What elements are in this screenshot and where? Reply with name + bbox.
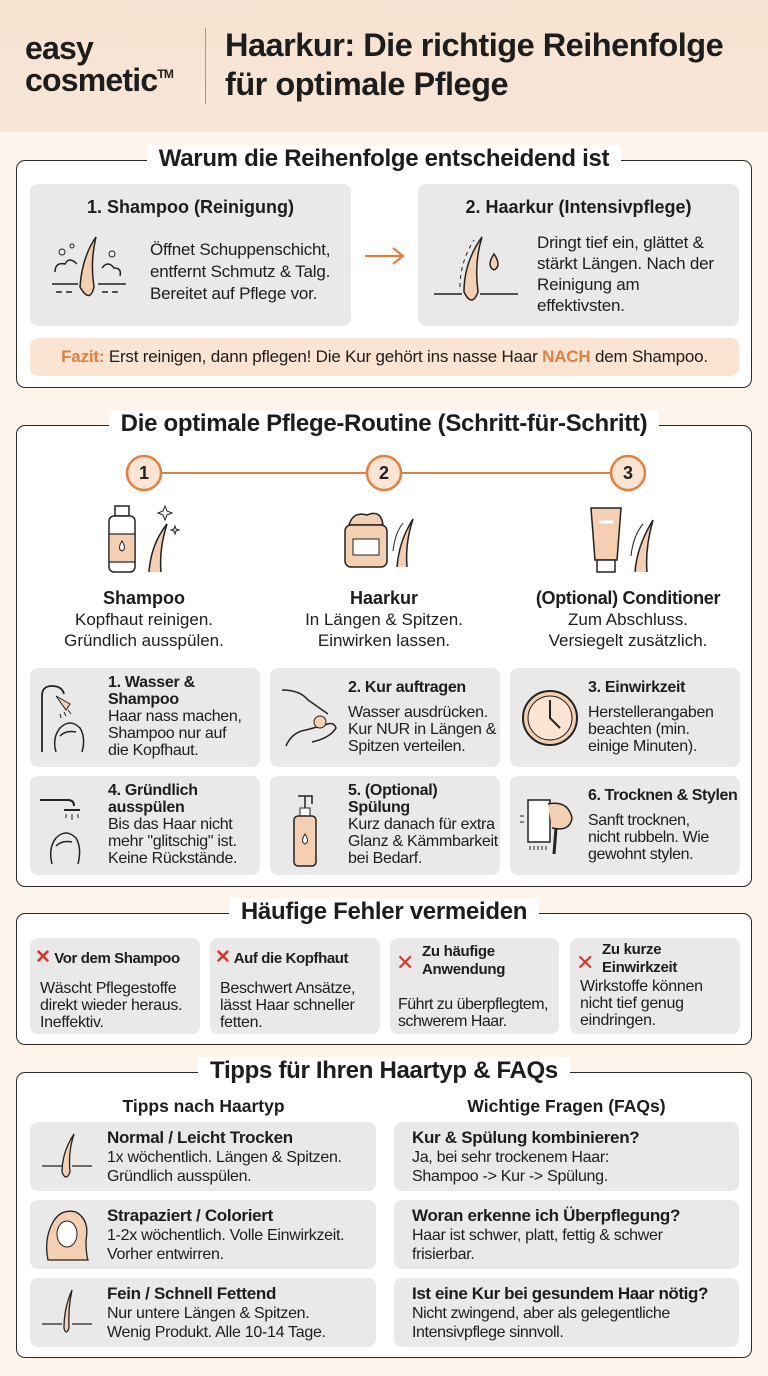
timeline: 2 — [379, 463, 389, 483]
card: kur auftragen: 2. Kur auftragen — [348, 679, 466, 696]
card: normal: 1x wöchentlich. Längen & Spitzen. — [107, 1149, 342, 1166]
panel: tipps — [16, 1072, 752, 1358]
icon: hair drop — [434, 236, 518, 301]
icon: clock — [522, 690, 578, 746]
card: zu kurz: Einwirkzeit — [602, 959, 677, 976]
fazit bar — [30, 338, 739, 376]
icon: hair — [42, 1134, 92, 1178]
step 2 text: Haarkur — [350, 588, 418, 608]
icon: hair with foam — [52, 236, 126, 296]
card: strapaziert — [30, 1200, 376, 1269]
card: zu häufig — [390, 938, 559, 1034]
logo: easy — [25, 30, 93, 66]
timeline: 1 — [139, 463, 149, 483]
panel: warum — [16, 160, 752, 388]
timeline: 3 — [623, 463, 633, 483]
card: kopfhaut: ✕ Auf die Kopfhaut — [215, 947, 348, 968]
card: zu häufig: schwerem Haar. — [398, 1013, 507, 1030]
icon: jar — [344, 512, 414, 568]
card: vor dem shampoo — [30, 938, 200, 1034]
card: ausspülen: Bis das Haar nicht — [108, 816, 232, 833]
icon: thin hair — [42, 1290, 92, 1333]
faq 1: Kur & Spülung kombinieren? — [412, 1128, 639, 1147]
faq 3: Nicht zwingend, aber als gelegentliche — [412, 1305, 670, 1322]
card: normal: Normal / Leicht Trocken — [107, 1128, 293, 1147]
faq 2: frisierbar. — [412, 1246, 474, 1263]
card: zu kurz: Wirkstoffe können — [580, 978, 703, 995]
text: haarkur: stärkt Längen. Nach der — [537, 254, 714, 273]
card: wasser — [30, 668, 260, 767]
card: einwirkzeit: einige Minuten). — [588, 738, 697, 755]
card: spülung: bei Bedarf. — [348, 850, 422, 867]
card: zu häufig: Anwendung — [422, 961, 505, 978]
subheading right: Wichtige Fragen (FAQs) — [467, 1096, 666, 1116]
card: wasser: 1. Wasser & — [108, 674, 195, 691]
card: spülung: 5. (Optional) — [348, 782, 437, 799]
subheading left: Tipps nach Haartyp — [122, 1096, 285, 1116]
card: strapaziert: Vorher entwirren. — [107, 1246, 224, 1263]
card: ausspülen: ausspülen — [108, 799, 184, 816]
card: zu kurz: ✕ — [576, 950, 594, 975]
card: kur auftragen — [270, 668, 500, 767]
text: shampoo: entfernt Schmutz & Talg. — [150, 262, 330, 281]
card: haarkur: 2. Haarkur (Intensivpflege) — [465, 197, 692, 217]
card: fein: Fein / Schnell Fettend — [107, 1284, 276, 1303]
icon: tube — [590, 507, 654, 573]
step 2 text — [305, 588, 463, 650]
card: einwirkzeit — [510, 668, 740, 767]
card: kur auftragen: Spitzen verteilen. — [348, 738, 465, 755]
card: fein: Wenig Produkt. Alle 10-14 Tage. — [107, 1324, 326, 1341]
text: shampoo: Bereitet auf Pflege vor. — [150, 284, 317, 303]
logo: cosmeticTM — [25, 62, 173, 98]
card: zu häufig: Führt zu überpflegtem, — [398, 996, 548, 1013]
card: wasser: Shampoo — [108, 691, 179, 708]
card: trocknen: Sanft trocknen, — [588, 812, 690, 829]
header band — [0, 0, 768, 132]
text: haarkur: Dringt tief ein, glättet & — [537, 233, 704, 252]
step 3 text — [536, 588, 720, 650]
card: normal: Gründlich ausspülen. — [107, 1168, 251, 1185]
card: spülung: Kurz danach für extra — [348, 816, 495, 833]
card: wasser: Haar nass machen, — [108, 708, 242, 725]
card: zu kurz: eindringen. — [580, 1012, 656, 1029]
card: haarkur — [418, 184, 739, 326]
icon: woman hair — [46, 1210, 89, 1261]
card: trocknen: gewohnt stylen. — [588, 846, 693, 863]
text: haarkur — [537, 233, 714, 315]
heading: fehler: Häufige Fehler vermeiden — [241, 898, 527, 925]
faq 2: Haar ist schwer, platt, fettig & schwer — [412, 1227, 663, 1244]
card: kur auftragen: Wasser ausdrücken. — [348, 704, 488, 721]
card: einwirkzeit: beachten (min. — [588, 721, 690, 738]
card: wasser: die Kopfhaut. — [108, 742, 198, 759]
heading: tipps: Tipps für Ihren Haartyp & FAQs — [210, 1057, 558, 1084]
card: trocknen — [510, 776, 740, 875]
card: spülung: Spülung — [348, 799, 410, 816]
card: zu kurz — [570, 938, 740, 1034]
icon: towel + dryer — [520, 799, 573, 854]
card: ausspülen: mehr "glitschig" ist. — [108, 833, 237, 850]
card: ausspülen: Keine Rückstände. — [108, 850, 237, 867]
logo — [25, 30, 174, 98]
card: trocknen: 6. Trocknen & Stylen — [588, 787, 737, 804]
step 3 text: (Optional) Conditioner — [536, 588, 720, 608]
step 3 text: Zum Abschluss. — [568, 610, 688, 629]
faq 3: Ist eine Kur bei gesundem Haar nötig? — [412, 1284, 708, 1303]
step 1 text: Gründlich ausspülen. — [64, 631, 224, 650]
faq 2 — [394, 1200, 739, 1269]
panel: fehler — [16, 913, 752, 1045]
card: zu kurz: Zu kurze — [602, 941, 661, 958]
title — [225, 27, 723, 102]
card: spülung: Glanz & Kämmbarkeit — [348, 833, 498, 850]
card: einwirkzeit: 3. Einwirkzeit — [588, 679, 685, 696]
card: zu häufig: ✕ — [396, 950, 414, 975]
card: vor dem shampoo: ✕ Vor dem Shampoo — [35, 947, 180, 968]
card: fein: Nur untere Längen & Spitzen. — [107, 1305, 309, 1322]
card: einwirkzeit: Herstellerangaben — [588, 704, 714, 721]
card: wasser: Shampoo nur auf — [108, 725, 226, 742]
text: shampoo — [150, 240, 330, 303]
card: spülung — [270, 776, 500, 875]
heading: routine: Die optimale Pflege-Routine (Schritt-für-Schritt) — [121, 410, 647, 437]
icon: shampoo bottle — [108, 504, 180, 573]
card: strapaziert: Strapaziert / Coloriert — [107, 1206, 273, 1225]
icon: hands — [282, 689, 337, 746]
card: kopfhaut: lässt Haar schneller — [220, 997, 355, 1014]
card: normal — [30, 1122, 376, 1191]
faq 1: Shampoo -> Kur -> Spülung. — [412, 1168, 608, 1185]
card: strapaziert: 1-2x wöchentlich. Volle Einwirkzeit. — [107, 1227, 344, 1244]
card: ausspülen — [30, 776, 260, 875]
title: Haarkur: Die richtige Reihenfolge — [225, 27, 723, 63]
faq 3: Intensivpflege sinnvoll. — [412, 1324, 563, 1341]
card: ausspülen: 4. Gründlich — [108, 782, 198, 799]
faq 2: Woran erkenne ich Überpflegung? — [412, 1206, 680, 1225]
card: shampoo: 1. Shampoo (Reinigung) — [87, 197, 294, 217]
card: vor dem shampoo: Wäscht Pflegestoffe — [40, 980, 176, 997]
card: zu häufig: Zu häufige — [422, 943, 495, 960]
card: fein — [30, 1278, 376, 1347]
text: haarkur: Reinigung am — [537, 275, 640, 294]
step 1 text — [64, 588, 224, 650]
faq 1: Ja, bei sehr trockenem Haar: — [412, 1149, 609, 1166]
card: zu kurz: nicht tief genug — [580, 995, 684, 1012]
card: kopfhaut: fetten. — [220, 1014, 262, 1031]
card: kur auftragen: Kur NUR in Längen & — [348, 721, 496, 738]
card: kopfhaut: Beschwert Ansätze, — [220, 980, 355, 997]
icon: tap + head — [40, 799, 80, 864]
faq 1 — [394, 1122, 739, 1191]
icon: pump bottle — [293, 795, 317, 867]
card: kopfhaut — [210, 938, 380, 1034]
faq 3 — [394, 1278, 739, 1347]
text: shampoo: Öffnet Schuppenschicht, — [150, 240, 330, 259]
timeline — [126, 454, 646, 492]
title: für optimale Pflege — [225, 66, 508, 102]
step 1 text: Kopfhaut reinigen. — [75, 610, 213, 629]
step 3 text: Versiegelt zusätzlich. — [549, 631, 707, 650]
card: trocknen: nicht rubbeln. Wie — [588, 829, 709, 846]
card: vor dem shampoo: direkt wieder heraus. — [40, 997, 182, 1014]
card: vor dem shampoo: Ineffektiv. — [40, 1014, 104, 1031]
panel: routine — [16, 425, 752, 887]
step 2 text: In Längen & Spitzen. — [305, 610, 463, 629]
icon: shower — [41, 685, 84, 752]
text: haarkur: effektivsten. — [537, 296, 625, 315]
card: shampoo — [30, 184, 351, 326]
heading: warum: Warum die Reihenfolge entscheidend ist — [159, 145, 609, 172]
step 1 text: Shampoo — [103, 588, 185, 608]
step 2 text: Einwirken lassen. — [318, 631, 450, 650]
fazit bar: Fazit: Erst reinigen, dann pflegen! Die Kur gehört ins nasse Haar NACH dem Shampoo. — [61, 347, 708, 366]
arrow — [365, 247, 405, 265]
